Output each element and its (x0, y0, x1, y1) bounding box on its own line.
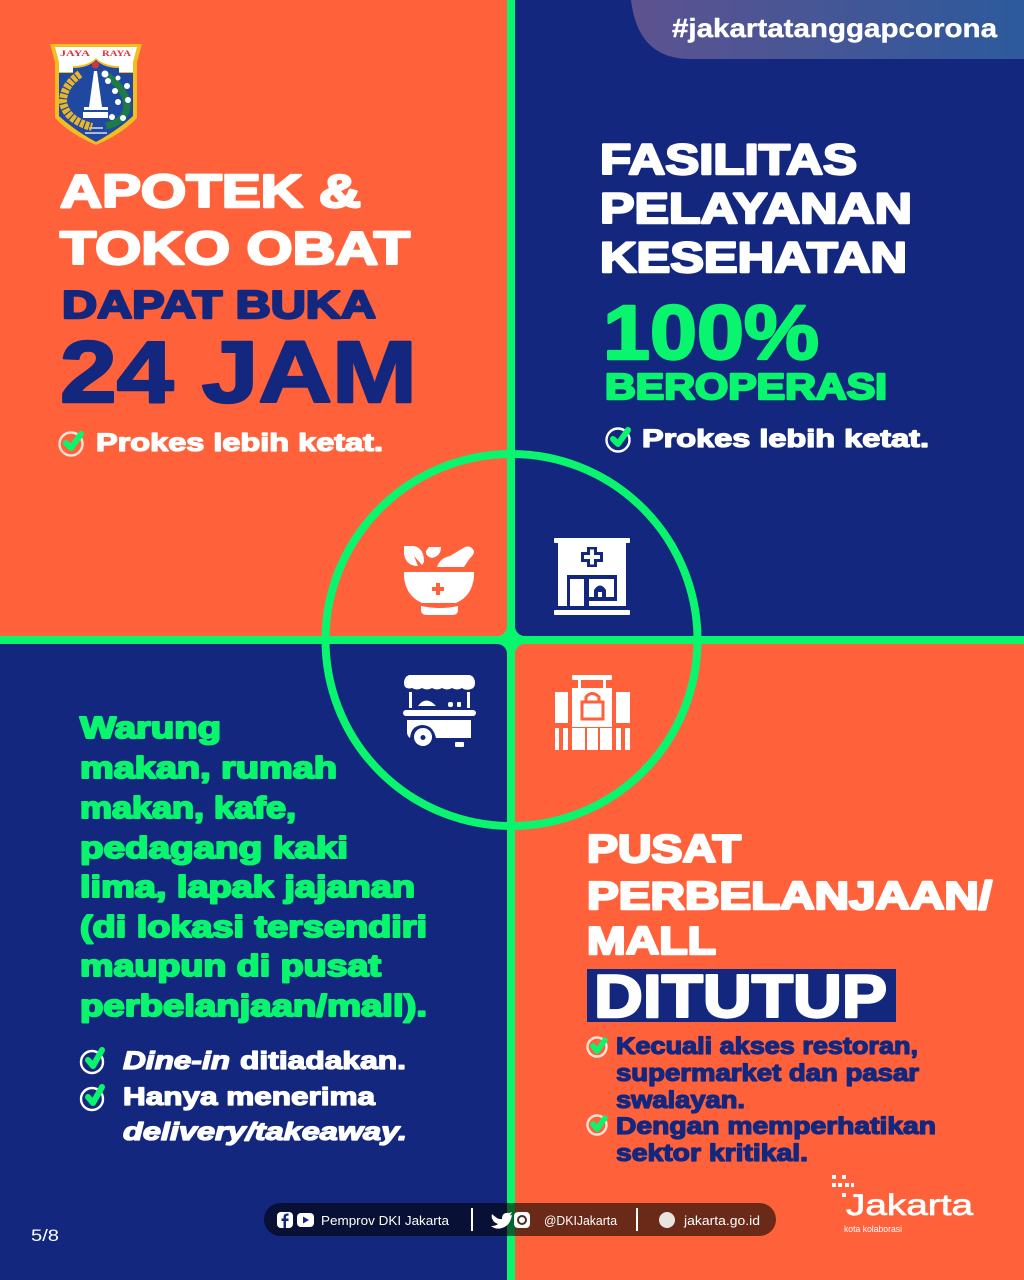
icon: food cart (403, 675, 476, 747)
text: dine-in: Dine-in (123, 1047, 230, 1075)
text: sektor kritikal note (616, 1113, 936, 1167)
text: dapat buka: DAPAT BUKA (62, 284, 376, 327)
panel: pusat perbelanjaan (515, 644, 1024, 1280)
icon: closed mall (555, 675, 630, 750)
icon: check mark (606, 428, 630, 452)
icon: youtube (297, 1213, 314, 1227)
text: website: jakarta.go.id (683, 1213, 760, 1228)
label: ditutup: DITUTUP (594, 963, 887, 1030)
icon: mortar and pestle (404, 546, 474, 615)
heading: fasilitas pelayanan kesehatan: PELAYANAN (600, 185, 912, 233)
icon: check mark (81, 1050, 103, 1073)
heading: fasilitas pelayanan kesehatan: FASILITAS (600, 136, 857, 184)
heading: pusat perbelanjaan mall: MALL (587, 920, 716, 963)
text: sektor kritikal note: sektor kritikal. (616, 1140, 808, 1167)
page number: 5/8 (31, 1226, 59, 1245)
panel: warung dan rumah makan (0, 644, 507, 1280)
text: warung list (80, 710, 427, 1023)
panel: fasilitas pelayanan kesehatan (515, 0, 1024, 636)
heading: pusat perbelanjaan mall: PERBELANJAAN/ (587, 875, 992, 918)
text: kecuali note: supermarket dan pasar (616, 1060, 919, 1087)
text: beroperasi: BEROPERASI (605, 366, 887, 407)
logo: Jakarta kota kolaborasi: Jakarta (846, 1189, 973, 1222)
text: warung list: Warung (80, 710, 221, 745)
text: warung list: maupun di pusat (80, 948, 381, 983)
text: warung list: lima, lapak jajanan (80, 869, 415, 904)
text: 100%: 100% (603, 290, 819, 376)
text: delivery note (123, 1083, 407, 1146)
text: prokes note: Prokes lebih ketat. (642, 425, 929, 453)
text: warung list: (di lokasi tersendiri (80, 909, 427, 944)
panel: apotek and toko obat (0, 0, 507, 636)
text: 24 jam: 24 JAM (60, 324, 417, 421)
heading: fasilitas pelayanan kesehatan (600, 136, 912, 282)
icon: check mark (588, 1038, 606, 1056)
text: DKIJakarta handle: @DKIJakarta (544, 1213, 618, 1228)
heading: apotek and toko obat: APOTEK & (60, 165, 361, 217)
heading: fasilitas pelayanan kesehatan: KESEHATAN (600, 234, 907, 282)
text: kecuali note (616, 1033, 919, 1114)
text: prokes note: Prokes lebih ketat. (96, 429, 383, 457)
text: delivery note: delivery/takeaway. (123, 1118, 407, 1146)
hashtag banner (631, 0, 1024, 59)
text: dine-in (123, 1047, 406, 1075)
icon: check mark (588, 1116, 606, 1134)
footer social bar (264, 1203, 776, 1236)
center ring (326, 454, 698, 826)
heading: pusat perbelanjaan mall: PUSAT (587, 828, 741, 871)
text: kecuali note: swalayan. (616, 1087, 745, 1114)
heading: pusat perbelanjaan mall (587, 828, 992, 963)
icon: check mark (60, 432, 82, 456)
text: sektor kritikal note: Dengan memperhatikan (616, 1113, 936, 1140)
icon: website (659, 1212, 675, 1228)
text: warung list: makan, kafe, (80, 790, 296, 825)
icon: instagram (514, 1212, 530, 1228)
heading: apotek and toko obat (60, 165, 410, 274)
icon: twitter (491, 1212, 512, 1229)
heading: apotek and toko obat: TOKO OBAT (60, 222, 410, 274)
icon: Jakarta coat of arms (50, 44, 142, 145)
text: warung list: pedagang kaki (80, 830, 348, 865)
icon: Jakarta coat of arms: RAYA (102, 48, 132, 58)
logo: Jakarta kota kolaborasi: kota kolaborasi (844, 1224, 902, 1234)
icon: Jakarta coat of arms: JAYA (60, 48, 91, 58)
hashtag banner: #jakartatanggapcorona (672, 13, 998, 43)
text: Pemprov DKI Jakarta: Pemprov DKI Jakarta (321, 1213, 450, 1228)
text: kecuali note: Kecuali akses restoran, (616, 1033, 918, 1060)
icon: hospital (554, 538, 630, 615)
text: warung list: perbelanjaan/mall). (80, 988, 427, 1023)
text: warung list: makan, rumah (80, 750, 337, 785)
text: delivery note: Hanya menerima (123, 1083, 376, 1111)
logo: Jakarta kota kolaborasi (832, 1175, 973, 1234)
icon: check mark (81, 1087, 103, 1110)
icon: facebook (277, 1212, 293, 1228)
text: dine-in: ditiadakan. (240, 1047, 406, 1075)
